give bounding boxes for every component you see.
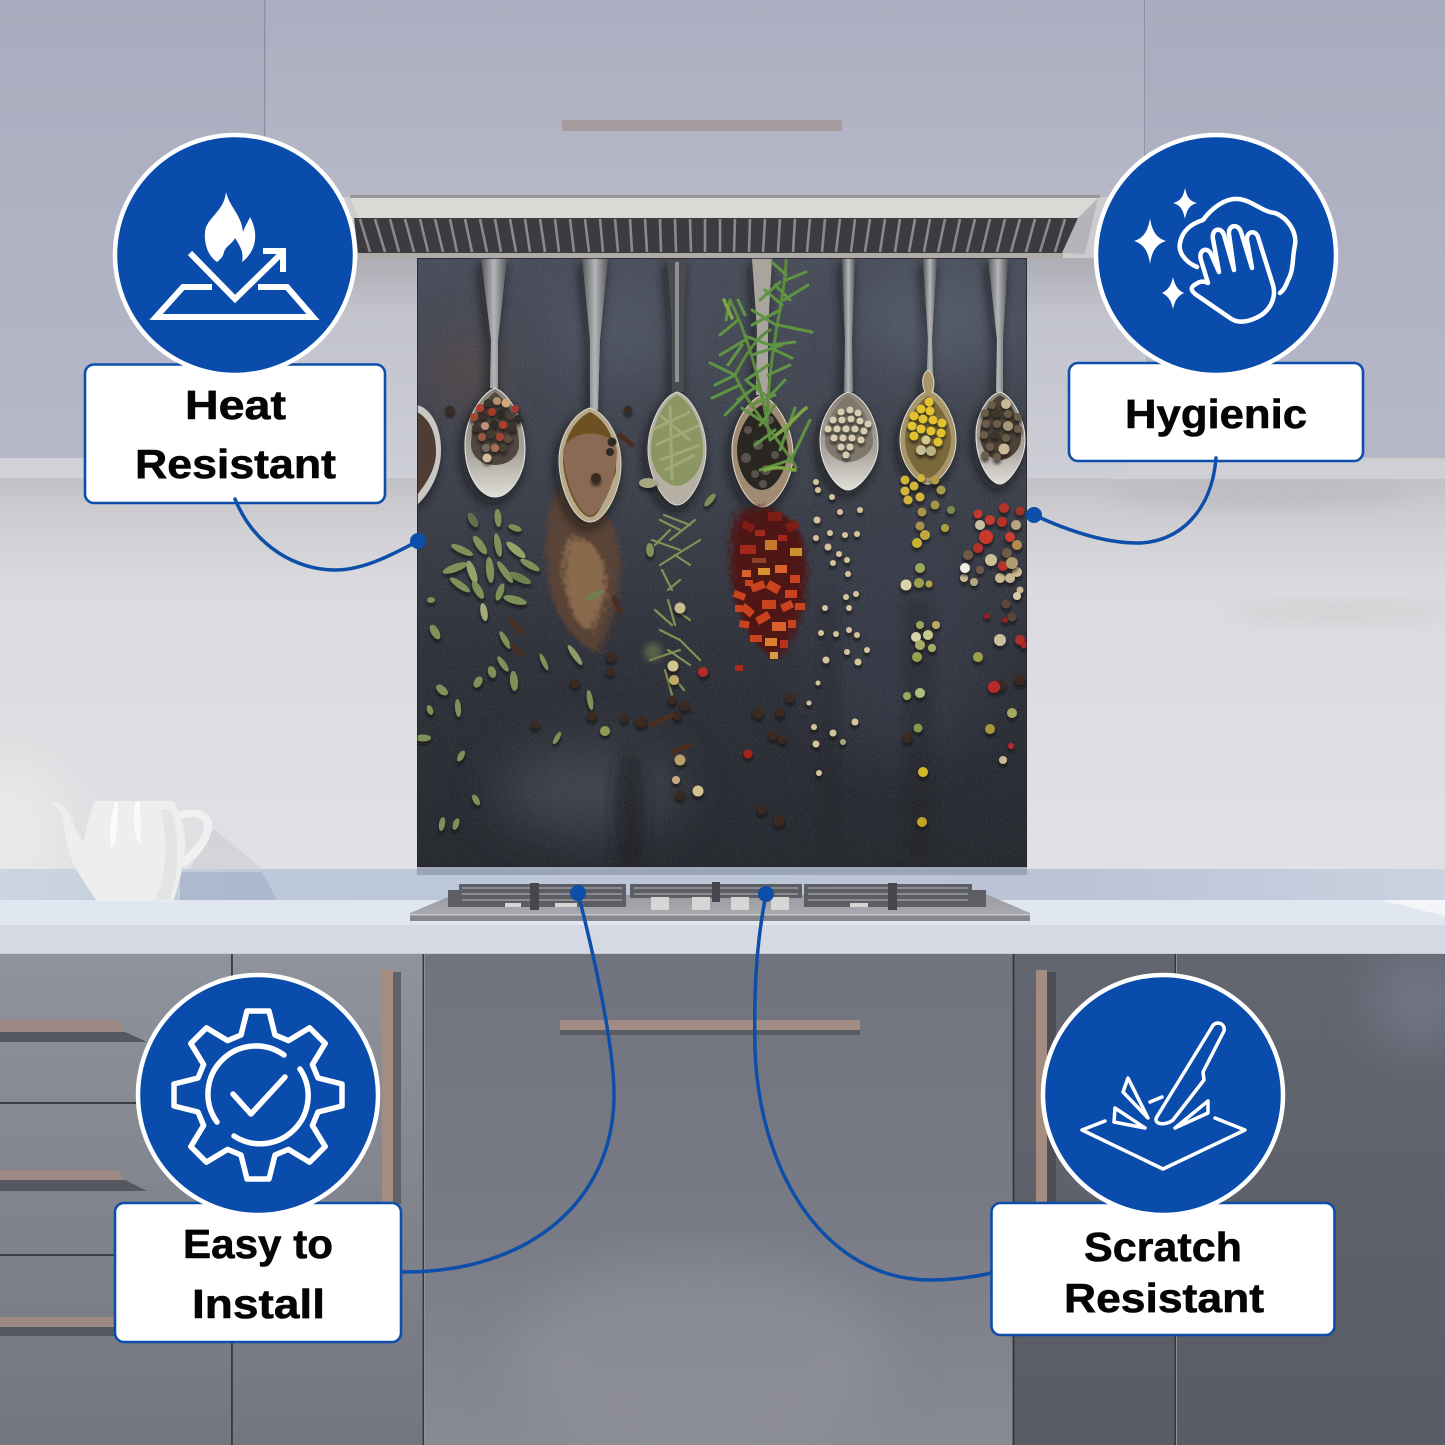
icon: flame on surface (156, 192, 313, 317)
label text: Easy to (183, 1221, 333, 1267)
spoon 5 (732, 258, 793, 507)
green herb trail (644, 515, 700, 695)
crushed red pepper flakes (730, 508, 807, 671)
spoon 2 (465, 258, 525, 497)
rosemary sprig (710, 260, 812, 470)
wall (0, 258, 1445, 900)
lower handles (0, 970, 1056, 1336)
splashback panel: spices on slate (415, 258, 1028, 870)
connector: hygienic (1034, 458, 1216, 543)
cloves (510, 435, 690, 752)
panel edge (417, 258, 1027, 867)
cooktop (410, 882, 1030, 921)
icon: gear with check (174, 1011, 342, 1179)
scattered peppercorns (446, 406, 1026, 827)
connector lines (235, 458, 1216, 1280)
label text: Scratch (1084, 1224, 1242, 1270)
spoon 3 (559, 258, 621, 522)
label box (1069, 363, 1363, 461)
connector: easy to install (402, 893, 614, 1272)
callout: Easy to Install (115, 975, 401, 1342)
upper cabinets (0, 0, 1445, 479)
callout: Hygienic (1069, 135, 1363, 461)
spoon 1 partial (417, 405, 441, 505)
lower cabinets (0, 950, 1445, 1445)
red and mixed peppercorn cluster (960, 503, 1028, 648)
label text: Install (192, 1281, 325, 1327)
label text (135, 382, 336, 487)
label text: Hygienic (1125, 391, 1307, 437)
callout: Scratch Resistant (992, 975, 1334, 1335)
slate texture (417, 258, 1027, 870)
badge circle (115, 135, 355, 375)
connector: scratch resistant (755, 894, 991, 1280)
connector: heat resistant (235, 499, 418, 570)
spoon 4 (648, 258, 706, 505)
label text: Resistant (135, 441, 336, 487)
label text: Heat (185, 382, 286, 428)
cabinet handle (562, 120, 842, 131)
connector dots (410, 507, 1042, 902)
spoon 8 (976, 258, 1025, 484)
spoon 7 (900, 258, 956, 484)
extractor hood (350, 195, 1100, 258)
label text (183, 1221, 333, 1327)
teapot (49, 801, 262, 901)
label box (992, 1203, 1334, 1335)
label box (115, 1203, 401, 1342)
badge circle (138, 975, 378, 1215)
badge circle (1096, 135, 1336, 375)
icon: hand wiping with sparkles (1134, 188, 1295, 322)
countertop (0, 867, 1445, 953)
spoon 6 (820, 258, 878, 490)
label text (1064, 1224, 1264, 1321)
label text: Resistant (1064, 1275, 1264, 1321)
label box (85, 364, 385, 503)
ground spice powder (546, 488, 620, 652)
callout: Heat Resistant (85, 135, 385, 503)
green leaves (415, 478, 717, 831)
badge circle (1043, 975, 1283, 1215)
icon: knife scratching surface (1082, 1023, 1245, 1169)
